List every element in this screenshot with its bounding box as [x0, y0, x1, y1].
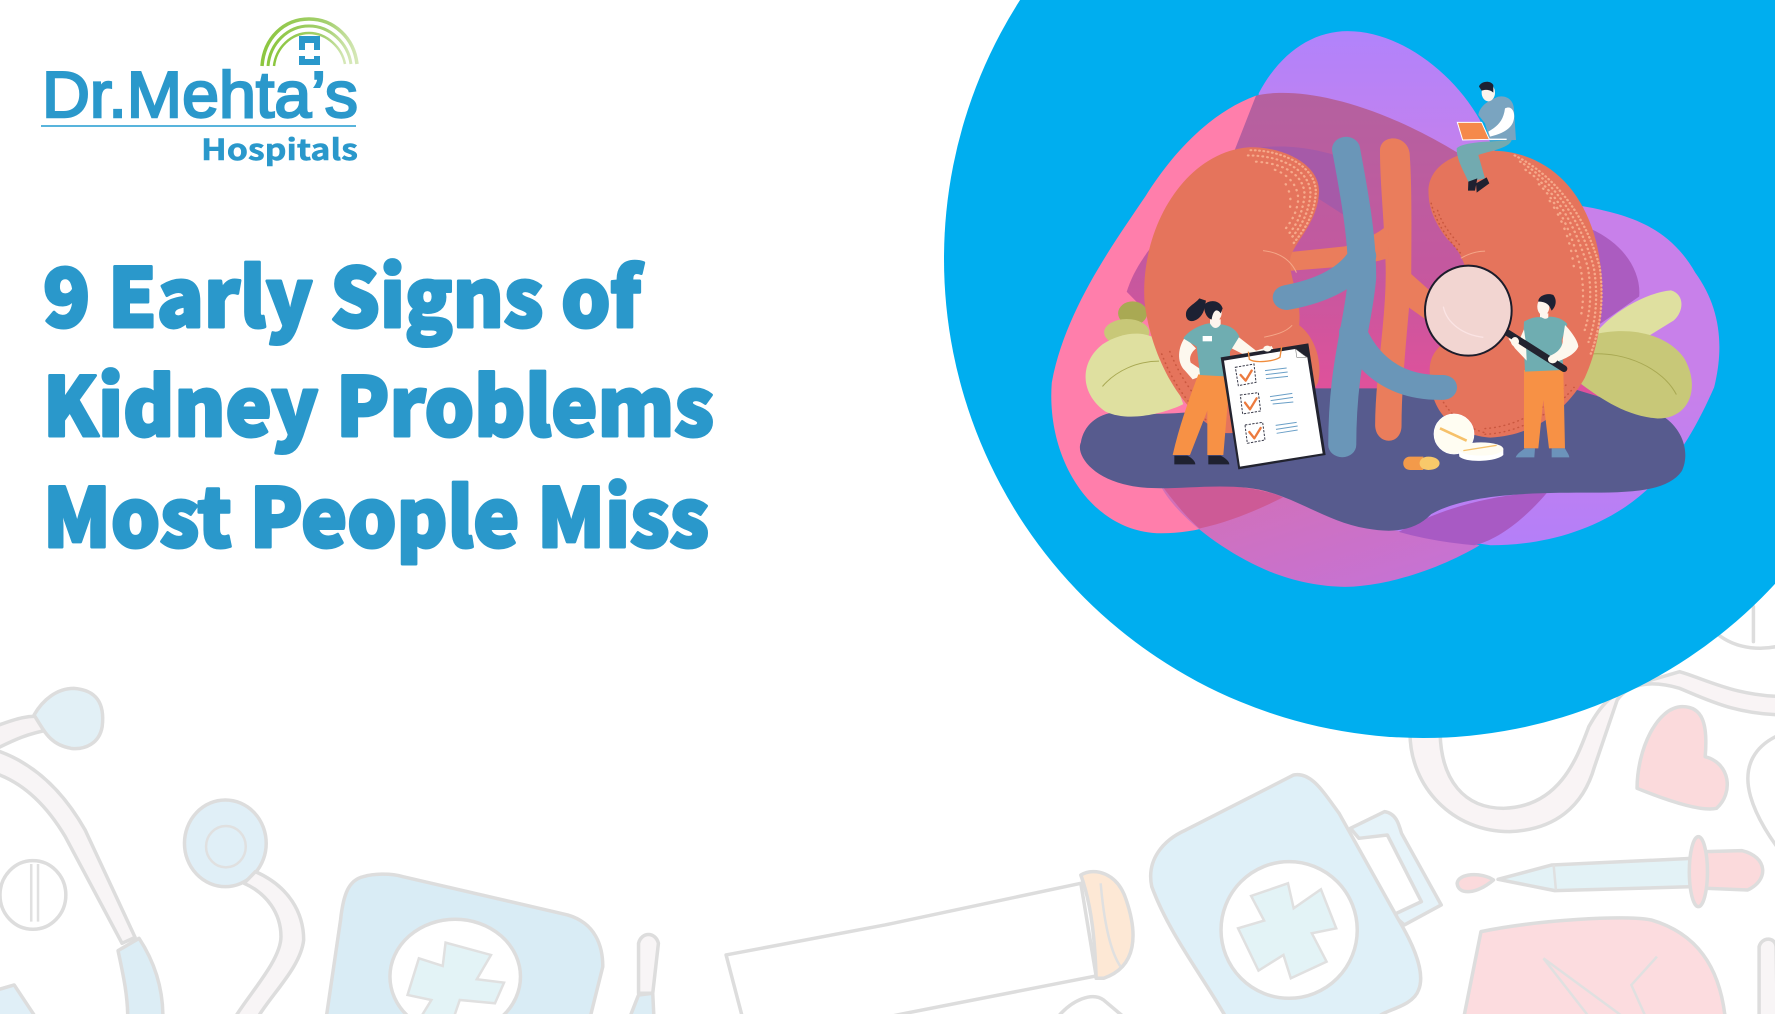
clipboard checklist [1221, 343, 1326, 469]
blob: dark purple right [1590, 229, 1639, 383]
blob: lower left overlap [1163, 485, 1283, 529]
stethoscope left [0, 688, 304, 1014]
person right [1508, 294, 1578, 457]
first aid kit left [326, 874, 603, 1014]
kidney illustration [1051, 31, 1719, 587]
background doodles: left group [0, 688, 658, 1014]
blob: light purple [1253, 31, 1719, 545]
magnifier, person right and pills [1403, 266, 1578, 470]
first aid kit right [1151, 775, 1441, 1014]
stethoscope hose [1410, 672, 1775, 832]
background doodles: right group [726, 607, 1775, 1014]
person on top with laptop [1457, 82, 1516, 193]
logo rainbow arcs [262, 19, 357, 66]
blob: mauve overlap [1127, 93, 1598, 411]
blob: lower magenta [1162, 488, 1480, 587]
title: 9 Early Signs of [43, 234, 645, 351]
right kidney [1428, 151, 1602, 438]
title: Kidney Problems [43, 343, 714, 460]
person left [1173, 298, 1274, 464]
heart [1637, 707, 1727, 809]
blob: lower dark purple [1399, 493, 1547, 545]
pill behind circle [1717, 607, 1775, 648]
magnifying glass [1425, 266, 1564, 369]
title: Most People Miss [43, 454, 709, 571]
blob: dark arc above left kidney [1248, 146, 1367, 230]
logo subtitle: Hospitals [201, 127, 358, 169]
right side tube [1748, 732, 1775, 860]
logo wordmark: Dr.Mehta’s [42, 58, 358, 131]
lower right pouch [1464, 918, 1725, 1014]
person left with clipboard [1173, 298, 1326, 469]
logo house icon [299, 36, 320, 65]
blue circle [944, 0, 1775, 738]
pill [0, 861, 66, 929]
dropper [1457, 837, 1763, 907]
title [43, 234, 714, 571]
ground shape [1080, 388, 1685, 531]
logo underline [41, 125, 356, 127]
blue vessel [1287, 149, 1443, 445]
thermometer [630, 935, 658, 1014]
blob: pink [1051, 96, 1307, 533]
bandage tube [726, 872, 1133, 1014]
logo [41, 19, 358, 169]
left kidney [1144, 147, 1319, 433]
leaves left [1086, 301, 1183, 417]
pills [1403, 414, 1503, 470]
leaves right [1579, 290, 1692, 419]
orange vessel [1286, 138, 1439, 441]
small items bottom [1058, 939, 1775, 1014]
